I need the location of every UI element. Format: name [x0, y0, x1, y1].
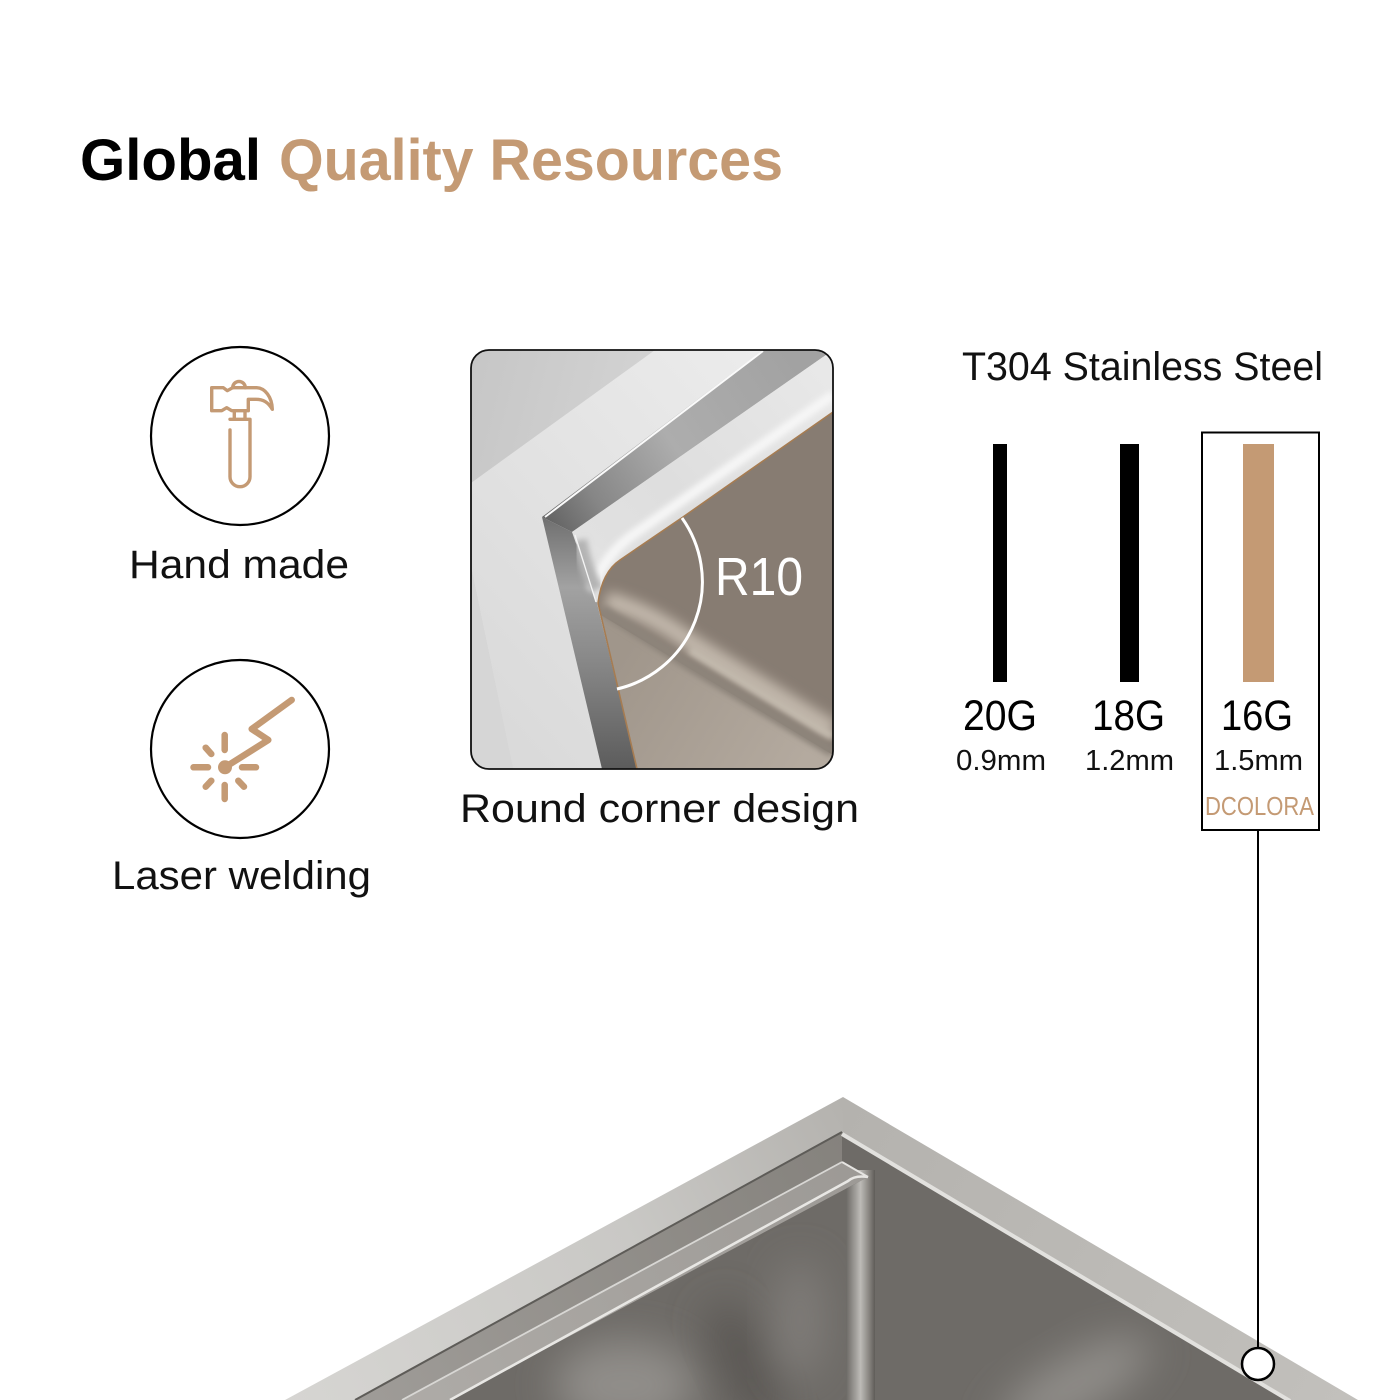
- label: hand made: Hand made: [129, 543, 349, 587]
- gauge: 20G: 0.9mm: [956, 745, 1046, 777]
- gauge: 20G: 20G: [963, 692, 1037, 740]
- gauge: 20G: [956, 444, 1046, 777]
- callout: leader line and marker: [1242, 830, 1274, 1380]
- gauge: 18G: 1.2mm: [1085, 745, 1174, 777]
- gauge: 18G: [1085, 444, 1174, 777]
- gauge: 16G highlighted box: 16G: [1221, 692, 1293, 740]
- title: Global: [80, 128, 261, 193]
- icon: laser welding in circle: [151, 660, 329, 838]
- gauge: 16G highlighted box: DCOLORA: [1205, 791, 1315, 821]
- title: Quality Resources: [279, 128, 783, 193]
- label: R10: R10: [715, 547, 803, 607]
- gauge: 16G highlighted box: [1202, 432, 1319, 830]
- panel: round corner photo: [471, 350, 833, 769]
- gauge: 18G: 18G: [1092, 692, 1165, 740]
- label: laser welding: Laser welding: [112, 854, 371, 898]
- gauge: 16G highlighted box: 1.5mm: [1214, 745, 1303, 777]
- icon: hammer in circle: [151, 347, 329, 525]
- label: round corner design: Round corner design: [460, 787, 859, 831]
- sink corner photo: [285, 1097, 1358, 1400]
- heading: T304 stainless steel: T304 Stainless Steel: [962, 345, 1323, 389]
